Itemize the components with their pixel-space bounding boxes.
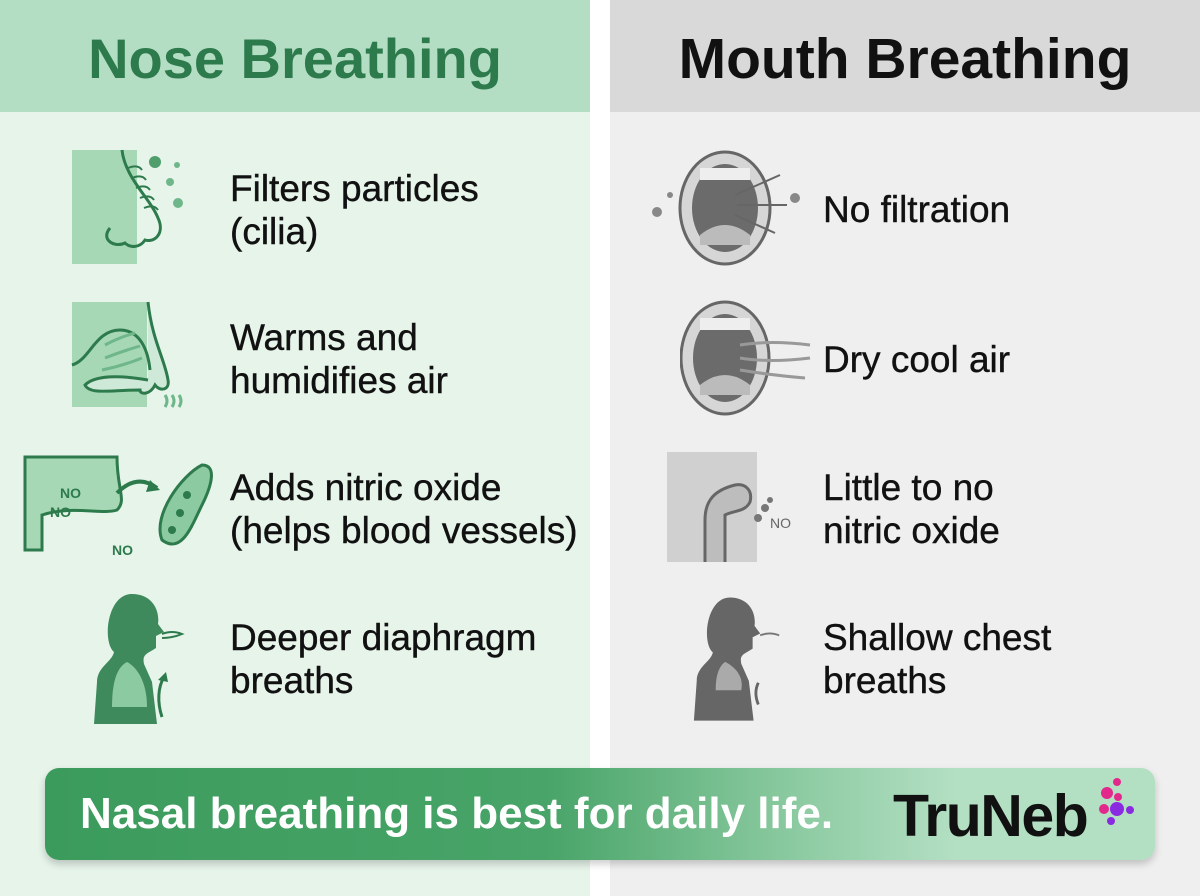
banner: conclusion xyxy=(45,768,1155,860)
text: no filtration: No filtration xyxy=(823,189,1010,230)
icon: shallow chest breathing xyxy=(694,598,780,721)
text: warms and humidifies xyxy=(230,317,448,401)
heading: nose breathing: Nose Breathing xyxy=(88,27,502,90)
text: adds nitric oxide: Adds nitric oxide xyxy=(230,467,501,508)
text: warms and humidifies: Warms and xyxy=(230,317,418,358)
text: little to no nitric oxide xyxy=(823,467,1000,551)
heading: mouth breathing: Mouth Breathing xyxy=(679,27,1131,91)
icon: nasal cavity warming xyxy=(72,302,182,408)
icon: open mouth no filtration xyxy=(652,150,800,266)
text: nasal breathing best: Nasal breathing is best for daily life. xyxy=(80,789,833,838)
text: adds nitric oxide: (helps blood vessels) xyxy=(230,510,578,551)
icon: nitric oxide xyxy=(24,456,213,558)
text: deeper diaphragm xyxy=(230,617,536,701)
text: dry cool air: Dry cool air xyxy=(823,339,1010,380)
heading: nose breathing xyxy=(0,0,590,112)
text: adds nitric oxide xyxy=(230,467,578,551)
panel: nose breathing xyxy=(0,0,590,896)
icon: nitric oxide: NO xyxy=(112,542,133,558)
text: filters particles xyxy=(230,168,479,252)
icon: head profile: NO xyxy=(770,515,791,531)
text: little to no nitric oxide: Little to no xyxy=(823,467,994,508)
heading: mouth breathing xyxy=(610,0,1200,112)
icon: nose filter xyxy=(72,150,183,264)
text: filters particles: Filters particles xyxy=(230,168,479,209)
text: deeper diaphragm: Deeper diaphragm xyxy=(230,617,536,658)
text: shallow chest breaths xyxy=(823,617,1052,701)
text: shallow chest breaths: breaths xyxy=(823,660,946,701)
icon: diaphragm breathing xyxy=(94,594,184,724)
text: little to no nitric oxide: nitric oxide xyxy=(823,510,1000,551)
icon: head profile xyxy=(667,452,791,562)
panel: mouth breathing xyxy=(610,0,1200,896)
text: deeper diaphragm: breaths xyxy=(230,660,353,701)
text: filters particles: (cilia) xyxy=(230,211,318,252)
text: shallow chest breaths: Shallow chest xyxy=(823,617,1051,658)
text: warms and humidifies: humidifies air xyxy=(230,360,448,401)
icon: nitric oxide: NO xyxy=(50,504,71,520)
logo: TruNeb: TruNeb xyxy=(893,783,1087,849)
icon: nitric oxide: NO xyxy=(60,485,81,501)
icon: mouth dry air xyxy=(680,300,810,416)
